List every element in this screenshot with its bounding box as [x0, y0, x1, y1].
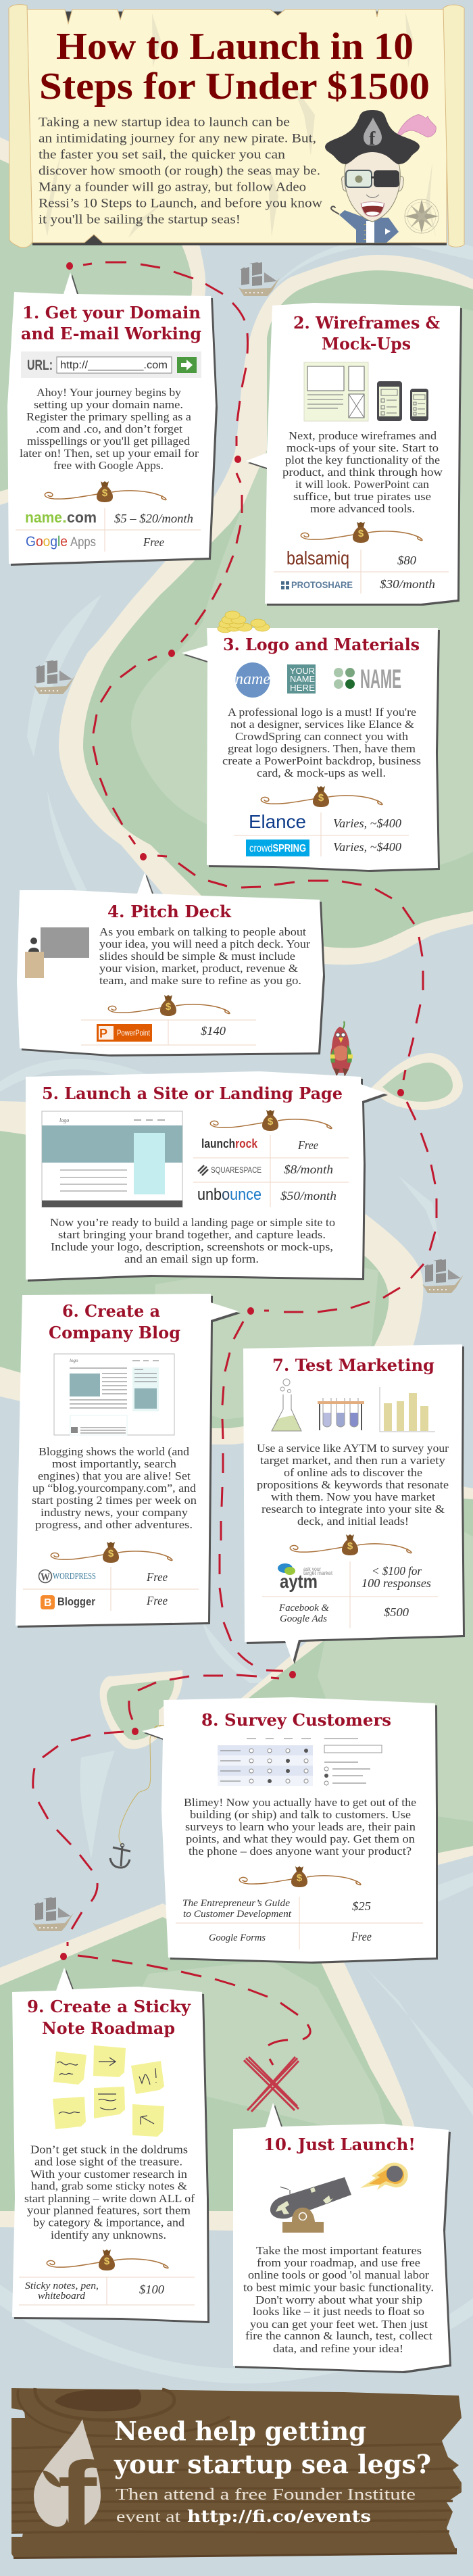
cost table: Apps — [70, 535, 96, 550]
cost table: < $100 for — [372, 1564, 422, 1578]
cost table: Free — [143, 535, 164, 549]
body text: building (or ship) and talk to customers. Use — [190, 1808, 411, 1821]
icon: Founder Institute logo: f — [57, 2443, 97, 2547]
cost table: crowdSPRING — [249, 843, 306, 854]
body text: create a PowerPoint backdrop, business — [222, 754, 421, 767]
cost table: launchrock — [201, 1137, 258, 1150]
cost table: WORDPRESS — [53, 1572, 96, 1582]
cost table: Google — [26, 534, 68, 550]
heading: Mock-Ups — [322, 334, 411, 354]
heading: 4. Pitch Deck — [107, 902, 232, 921]
footer text — [114, 2416, 431, 2526]
cost table: PROTOSHARE — [291, 579, 353, 590]
body text: suffice, but true pirates use — [293, 490, 431, 503]
intro text: discover how smooth (or rough) the seas may be. — [39, 164, 320, 178]
cost table: $140 — [201, 1024, 226, 1038]
sample logos: NAME — [290, 674, 315, 684]
icon: money bag divider: $ — [318, 792, 324, 804]
icon: Founder Institute logo — [34, 2419, 101, 2547]
intro text: Ressi’s 10 Steps to Launch, and before you know — [39, 197, 322, 211]
cost table: unbounce — [197, 1186, 262, 1204]
cost table: The Entrepreneur’s Guide — [182, 1898, 290, 1909]
body text: Now you’re ready to build a landing page or simple site to — [50, 1216, 335, 1229]
icon: money bag divider — [45, 481, 166, 502]
cost table — [274, 548, 449, 593]
icon: parrot — [330, 1021, 353, 1077]
icon: rope and anchor — [110, 1725, 164, 1868]
footer text: your startup sea legs? — [114, 2449, 431, 2479]
footer text: Then attend a free Founder Institute — [116, 2486, 416, 2504]
cost table: whiteboard — [38, 2291, 86, 2302]
cost table: Free — [146, 1570, 168, 1584]
heading: Note Roadmap — [42, 2018, 175, 2038]
icon: money bag divider — [108, 995, 230, 1016]
body text: your planned features, sort them — [27, 2204, 191, 2217]
blog mockup — [54, 1354, 174, 1435]
body text: propositions & keywords that resonate — [257, 1478, 449, 1491]
footer text: http://fi.co/events — [187, 2506, 371, 2526]
body text: CrowdSpring can connect you with — [235, 730, 409, 743]
icon: money bag divider: $ — [268, 1116, 274, 1127]
cost table: $8/month — [284, 1163, 333, 1176]
scroll right roller — [443, 5, 464, 247]
footer text: Need help getting — [114, 2416, 366, 2446]
sample logos: YOUR — [290, 666, 315, 676]
title: Steps for Under $1500 — [39, 66, 430, 107]
body text — [184, 1796, 416, 1857]
heading: 10. Just Launch! — [264, 2135, 416, 2154]
cost table — [16, 508, 201, 552]
footer text: event at — [116, 2508, 180, 2526]
land: right of survey — [162, 1486, 473, 1866]
sample logos — [235, 662, 401, 698]
body text: start posting 2 times per week on — [32, 1494, 197, 1507]
icon: pirate — [325, 110, 436, 243]
cost table: ask your — [303, 1566, 321, 1572]
cost table: $100 — [139, 2283, 164, 2296]
body text: Next, produce wireframes and — [289, 429, 437, 442]
cost table: name — [25, 509, 62, 526]
heading: 2. Wireframes & — [293, 313, 440, 333]
heading — [49, 1301, 180, 1342]
sample logos: NAME — [360, 664, 401, 694]
icon: pirate: f — [369, 128, 376, 149]
body text — [32, 1445, 197, 1531]
url bar: URL: — [27, 358, 53, 373]
cost table: $25 — [352, 1899, 371, 1913]
title: How to Launch in 10 — [56, 26, 414, 68]
body text: target market, and then run a variety — [260, 1454, 446, 1467]
panel: step 9 sticky note roadmap — [12, 1968, 209, 2323]
heading: Company Blog — [49, 1323, 180, 1342]
intro text: Taking a new startup idea to launch can be — [39, 116, 290, 130]
body text: it will look. PowerPoint can — [295, 478, 429, 491]
body text: research to integrate into your site & — [262, 1503, 445, 1515]
landing page mockup: logo — [59, 1117, 69, 1123]
cost table: Google Forms — [209, 1933, 266, 1943]
heading: 8. Survey Customers — [201, 1710, 391, 1730]
body text — [282, 429, 443, 515]
body text: data, and refine your idea! — [273, 2342, 403, 2355]
body text: industry news, your company — [41, 1506, 189, 1519]
intro text: an intimidating journey for any new pirate. But, — [39, 132, 316, 146]
body text — [243, 2244, 434, 2355]
body text: A professional logo is a must! If you're — [228, 706, 416, 719]
cost table: Free — [297, 1138, 318, 1152]
icon: cannon and cannonball — [270, 2162, 408, 2233]
body text: to best mimic your basic functionality. — [243, 2281, 434, 2294]
body text: team, and make sure to refine as you go. — [99, 974, 301, 987]
cost table: Free — [146, 1594, 168, 1607]
body text: and an email sign up form. — [124, 1253, 259, 1265]
icon: gold coins — [218, 611, 270, 633]
icon: money bag divider: $ — [347, 1540, 353, 1552]
heading: and E-mail Working — [21, 324, 201, 343]
body text: Include your logo, description, screenshots or mock-ups, — [51, 1240, 333, 1253]
url bar: http://_________.com — [60, 360, 168, 371]
cost table: PowerPoint — [117, 1028, 151, 1038]
icon: money bag divider — [239, 1866, 361, 1887]
body text — [24, 2143, 195, 2241]
cost table: Google Ads — [280, 1613, 327, 1624]
icon: money bag divider — [301, 522, 422, 543]
cost table: Sticky notes, pen, — [25, 2281, 99, 2291]
cost table: SQUARESPACE — [211, 1165, 262, 1175]
icon: money bag divider — [261, 786, 382, 807]
body text: most importantly, search — [52, 1457, 177, 1470]
heading — [27, 1997, 191, 2038]
treasure map dashed route — [33, 262, 437, 2065]
body text: your vision, market, product, revenue & — [99, 962, 298, 975]
cost table: balsamiq — [287, 548, 349, 568]
knot in wood — [55, 2389, 141, 2411]
body text — [222, 706, 421, 779]
land: island dot 5 — [371, 1053, 463, 1110]
body text: Blimey! Now you actually have to get out of the — [184, 1796, 416, 1809]
survey form illustration — [218, 1739, 382, 1786]
url bar — [21, 351, 201, 378]
body text: Blogging shows the world (and — [39, 1445, 190, 1458]
icon: money bag divider: $ — [297, 1872, 303, 1884]
panel: step 3 logo — [182, 628, 440, 872]
cost table — [176, 1897, 423, 1949]
body text: progress, and other adventures. — [35, 1518, 193, 1531]
body text: With your customer research in — [30, 2168, 187, 2181]
intro text — [39, 116, 322, 227]
icon: money bag divider — [290, 1534, 412, 1555]
cost table: B — [44, 1597, 52, 1609]
body text: Use a service like AYTM to survey your — [257, 1442, 449, 1455]
icon: compass — [405, 199, 439, 233]
body text: with them. Now you have market — [271, 1490, 435, 1503]
icon: presenter at podium — [25, 927, 89, 978]
icons: flask, test tubes, bar chart — [272, 1379, 435, 1432]
cost table: $30/month — [380, 577, 435, 591]
icon: money bag divider: $ — [104, 2256, 110, 2267]
cost table: Blogger — [57, 1595, 95, 1608]
body text: Register the primary spelling as a — [26, 410, 192, 423]
heading — [21, 303, 201, 343]
body text: from your roadmap, and use free — [257, 2256, 420, 2269]
panel: step 7 test marketing — [243, 1344, 465, 1664]
body text — [50, 1216, 335, 1265]
icon: red X marks the spot — [244, 2057, 299, 2112]
intro text: it you'll be sailing the startup seas! — [39, 213, 241, 227]
heading: 9. Create a Sticky — [27, 1997, 191, 2016]
icon: money bag divider — [47, 2250, 168, 2270]
cost table: Elance — [249, 811, 306, 832]
wireframe illustration — [304, 362, 428, 421]
land: dot 8 island — [100, 1670, 182, 1749]
landing page mockup — [42, 1111, 182, 1207]
body text: up “blog.yourcompany.com”, and — [32, 1482, 197, 1494]
body text: card, & mock-ups as well. — [257, 767, 386, 779]
body text: looks like – it just needs to float so — [253, 2305, 424, 2318]
panel: step 4 pitch deck — [17, 873, 325, 1056]
heading — [293, 313, 440, 354]
body text: mock-ups of your site. Start to — [287, 441, 439, 454]
body text: free with Google Apps. — [53, 459, 164, 472]
body text: misspellings or you'll get pillaged — [27, 435, 191, 447]
cost table — [23, 1567, 199, 1611]
cost table: $50/month — [280, 1189, 337, 1202]
ships — [32, 262, 464, 1931]
body text: online tools or good 'ol manual labor — [248, 2268, 430, 2281]
cost table: to Customer Development — [183, 1909, 292, 1920]
panel: step 10 just launch — [233, 2103, 451, 2373]
cost table — [262, 1561, 438, 1628]
cost table — [81, 1020, 256, 1045]
cost table: Facebook & — [278, 1603, 329, 1613]
body text: of online ads to discover the — [284, 1466, 422, 1479]
body text: plot the key functionality of the — [285, 454, 440, 466]
cost table: aytm — [280, 1571, 318, 1592]
cost table: 100 responses — [362, 1576, 431, 1590]
body text: Don’t get stuck in the doldrums — [30, 2143, 188, 2156]
scroll left roller — [9, 5, 32, 247]
body text: and lose sight of the treasure. — [34, 2156, 182, 2168]
panel: step 2 wireframes — [246, 303, 462, 606]
blog mockup: logo — [70, 1358, 78, 1363]
land: right mainland — [59, 255, 473, 965]
cost table: . — [62, 509, 67, 526]
cost table: Varies, ~$400 — [333, 840, 401, 854]
panel: step 6 company blog — [16, 1294, 241, 1628]
body text: the phone – does anyone want your product? — [189, 1845, 412, 1857]
sticky notes — [53, 2045, 164, 2137]
icon: money bag divider: $ — [108, 1548, 114, 1559]
cost table: $5 – $20/month — [114, 512, 193, 525]
body text: Ahoy! Your journey begins by — [36, 386, 182, 399]
body text: engines) that you are alive! Set — [38, 1469, 191, 1482]
cost table: W — [41, 1572, 50, 1583]
panel: step 1 domain and e-mail — [7, 272, 218, 566]
body text: surveys to learn who your leads are, their pain — [185, 1820, 416, 1833]
title — [39, 26, 430, 107]
intro text: Many a founder will go astray, but follow Adeo — [39, 180, 306, 195]
heading: 3. Logo and Materials — [223, 635, 420, 654]
body text: later on! Then, set up your email for — [20, 447, 199, 460]
icon: money bag divider — [51, 1542, 172, 1563]
footer wooden sign — [11, 2388, 462, 2559]
icon: money bag divider: $ — [358, 528, 364, 539]
icon: money bag divider: $ — [102, 487, 108, 499]
body text: not a designer, services like Elance & — [230, 718, 414, 731]
body text: start planning – write down ALL of — [24, 2192, 195, 2205]
body text: start bringing your brand together, and capture leads. — [58, 1228, 326, 1241]
cost table: Varies, ~$400 — [333, 817, 401, 830]
cost table — [193, 1135, 349, 1207]
cost table: Free — [351, 1930, 372, 1943]
body text: setting up your domain name. — [34, 398, 183, 411]
body text: your idea, you will need a pitch deck. Your — [99, 938, 311, 950]
cost table — [19, 2277, 195, 2305]
body text: .com and .co, and don’t forget — [36, 422, 182, 435]
body text: slides should be simple & must include — [99, 950, 295, 963]
cost table: com — [67, 509, 97, 526]
heading: 6. Create a — [62, 1301, 160, 1321]
body text: points, and what they would pay. Get them on — [186, 1832, 415, 1845]
icon: money bag divider: $ — [166, 1001, 172, 1013]
heading: 1. Get your Domain — [22, 303, 201, 322]
cost table: $500 — [384, 1605, 409, 1619]
body text — [99, 925, 311, 987]
sample logos: name — [235, 671, 270, 688]
body text: identify any unknowns. — [51, 2229, 166, 2241]
body text: Don't worry about what your ship — [255, 2293, 422, 2306]
land: lower middle — [0, 1903, 439, 2231]
sample logos: HERE — [290, 683, 315, 693]
scroll banner — [9, 5, 464, 247]
panel: step 5 landing page — [26, 1071, 388, 1282]
body text: hand, grab some sticky notes & — [31, 2180, 187, 2193]
intro text: the faster you set sail, the quicker you can — [39, 148, 286, 162]
body text — [257, 1442, 449, 1528]
icon: money bag divider — [210, 1110, 332, 1131]
body text — [20, 386, 199, 472]
cost table: $80 — [397, 554, 416, 567]
panel: step 8 survey customers — [142, 1697, 438, 1964]
body text: As you embark on talking to people about — [99, 925, 306, 938]
body text: more advanced tools. — [310, 502, 415, 515]
land: top left — [0, 137, 205, 505]
heading: 5. Launch a Site or Landing Page — [42, 1084, 343, 1103]
body text: you can get your feet wet. Then just — [250, 2318, 428, 2331]
body text: by category & importance, and — [33, 2216, 185, 2229]
cost table: P — [99, 1027, 107, 1040]
cost table: target market — [303, 1570, 333, 1576]
body text: fire the cannon & launch, test, collect — [245, 2329, 432, 2342]
body text: deck, and initial leads! — [297, 1515, 409, 1528]
body text: product, and think through how — [282, 466, 443, 479]
body text: great logo designers. Then, have them — [228, 742, 416, 755]
cost table — [234, 811, 409, 856]
land: lower band — [0, 1101, 423, 1444]
body text: Take the most important features — [256, 2244, 422, 2257]
heading: 7. Test Marketing — [272, 1355, 434, 1375]
